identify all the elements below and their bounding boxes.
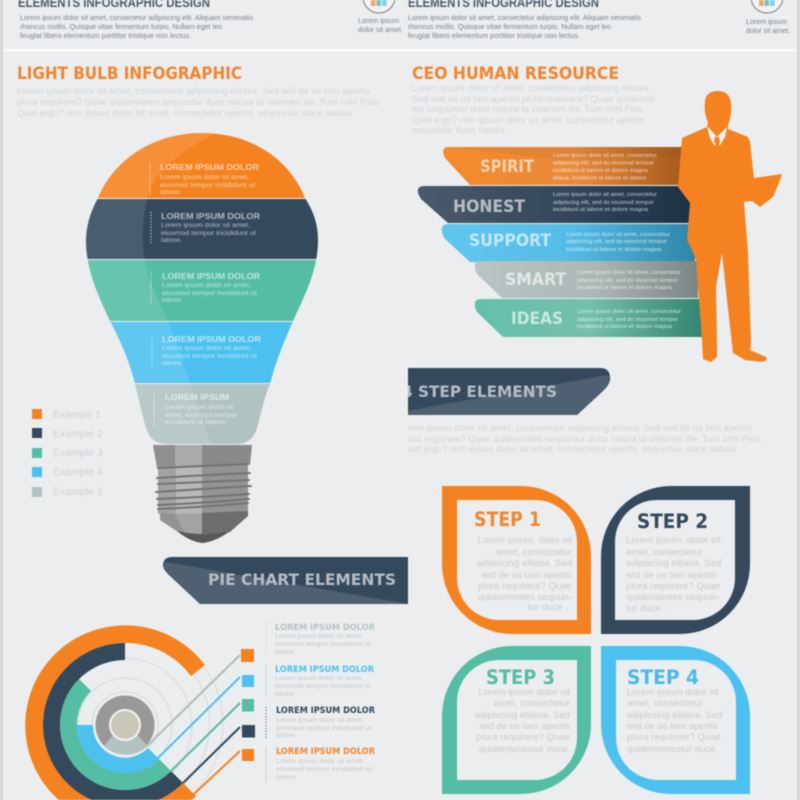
band 2 text: eiusmod tempor incididunt ut: [161, 231, 256, 237]
text block: step intro: [408, 423, 762, 454]
step 3 body: amet, consectetur: [494, 698, 571, 709]
band 3 text: eiusmod tempor incididunt ut: [162, 291, 257, 297]
band 2 text: labore.: [161, 238, 182, 244]
step 1 body: tur duce .: [528, 602, 568, 613]
ribbon: spirit: Lorem ipsum dolor sit amet, consectetur: [553, 153, 657, 159]
marker: blue: [242, 675, 254, 687]
ribbon: honest: incididunt ut labore et dolore magna: [553, 207, 648, 213]
step 2 body: [625, 535, 721, 614]
text block: left header description: Lorem ipsum dolor sit amet, consectetur adipiscing elit. Aliquam venenatis: [20, 15, 254, 22]
step 1 body: Lorem ipsum, dolor sit: [478, 535, 572, 546]
text block: CEO intro: Quid ergo? rem ipsum dolor sit amet, consectetur apertis.: [412, 115, 647, 125]
marker: orange top: [241, 649, 254, 662]
ring segment: blue: [77, 725, 159, 773]
step 4 heading: STEP 4: [627, 666, 699, 689]
band 3 text: LOREM IPSUM DOLOR: [162, 271, 260, 281]
label: orange item: Lorem ipsum dolor sit amet,: [276, 758, 364, 765]
ribbon: ideas: IDEAS: [511, 309, 563, 329]
text block: light bulb intro: Quid ergo? rem ipsum dolor sit amet, consectetur apertis. sequuntur duce natura: [17, 108, 352, 118]
inner ring: grey: [95, 695, 155, 746]
band 3 text: Lorem ipsum dolor sit amet,: [162, 283, 251, 289]
step 4 body: adipiscing elitasa. Sed: [627, 710, 722, 721]
ring segment: teal: [60, 679, 171, 790]
banner: 4 step elements: 4 STEP ELEMENTS: [402, 382, 557, 401]
leader line: blue: [158, 677, 240, 758]
ring segment: orange: [25, 625, 205, 800]
text block: CEO intro: Sed wid de us tam apertis plura requirere? Quae quidemie-: [412, 94, 657, 104]
label: grey item: LOREM IPSUM DOLOR: [275, 623, 375, 633]
band 4 text: eiusmod tempor incididunt ut: [162, 354, 257, 360]
step 4 frame: [601, 646, 750, 794]
label: navy item: Lorem ipsum dolor sit amet,: [276, 717, 364, 724]
text block: left header description: feugiat libero elementum porttitor tristique non lectus.: [20, 33, 191, 40]
ribbon: support: incididunt ut labore et dolore magna: [566, 247, 661, 253]
step 1 heading: STEP 1: [474, 508, 541, 531]
text block: light bulb intro: plura requirere? Quae quidemietes sequuntur duce natura ta videntes ille. Tum mihi Piso.: [17, 97, 380, 107]
ribbon: spirit: SPIRIT: [480, 157, 534, 177]
text: left header icon caption: Lorem ipsum: [358, 18, 399, 25]
text: left header icon caption: [358, 18, 403, 34]
label: grey item: [266, 623, 375, 656]
leader line: navy: [183, 727, 240, 783]
step 2 body: tur duce .: [626, 603, 666, 614]
step 4 body: plura requirere? Quae: [627, 732, 721, 743]
step 2 body: plura requirere? Quae: [626, 581, 720, 592]
text: right header icon caption: [746, 19, 790, 35]
necktie: [714, 137, 720, 151]
ribbon: honest: [418, 186, 692, 223]
ribbon: support: Lorem ipsum dolor sit amet, consectetur: [566, 232, 670, 238]
band 2 text: LOREM IPSUM DOLOR: [161, 211, 260, 221]
ribbon: smart: SMART: [505, 270, 566, 290]
band 4 text: Lorem ipsum dolor sit amet,: [162, 346, 251, 352]
text block: light bulb intro: [17, 86, 380, 118]
icon: businessman silhouette: [678, 91, 782, 362]
icon: left header chart badge: [363, 0, 395, 13]
ribbon: smart: [475, 261, 698, 298]
heading: CEO human resource: CEO HUMAN RESOURCE: [412, 64, 619, 84]
inner wedge: pale: [104, 735, 148, 755]
banner: 4 step elements: [400, 368, 610, 415]
label: orange item: LOREM IPSUM DOLOR: [276, 747, 375, 757]
step 2 body: adipiscing elitasa. Sed: [626, 558, 721, 569]
ribbon: honest: HONEST: [453, 197, 525, 217]
legend item: example 1: Example 1: [53, 410, 101, 421]
label: navy item: eiusmod tempor incididunt ut: [276, 725, 372, 732]
step 1 body: amet, consectetur: [496, 547, 573, 558]
text: right header icon caption: dolor sit amet.: [746, 28, 790, 35]
step 3 body: plura requirere? Quae: [476, 732, 570, 743]
band 3 text: [151, 271, 260, 304]
ribbon: smart: incididunt ut labore et dolore magna: [577, 285, 672, 291]
legend item: example 4: Example 4: [53, 467, 103, 478]
light bulb chart: [80, 130, 325, 543]
step 2 body: Lorem ipsum, dolor sit: [626, 535, 721, 546]
band 5 text: incididunt ut labore.: [165, 420, 227, 426]
text block: CEO intro: tes sequuntur duce natura ta videntes ille. Tum mihi Piso.: [412, 104, 645, 114]
marker: teal: [242, 699, 254, 712]
legend item: example 2: Example 2: [53, 429, 103, 440]
band 4 text: labore.: [162, 361, 183, 367]
ribbon: spirit: adipiscing elit, sed do eiusmod tempor: [553, 160, 654, 166]
text block: light bulb intro: Lorem ipsum dolor sit amet, consectetur adipiscing elitasa. Sed wid de us tam apertis: [17, 86, 371, 96]
centre circle: [110, 710, 140, 740]
step 4 body: quidemiesestur duce.: [627, 744, 718, 755]
bulb screw base: [153, 445, 252, 543]
text block: left header description: [20, 15, 254, 40]
label: grey item: Lorem ipsum dolor sit amet,: [275, 633, 363, 640]
shirt: [707, 126, 727, 150]
legend: [32, 409, 103, 498]
step 3 body: adipiscing elitasa. Sed: [475, 710, 570, 721]
label: orange item: eiusmod tempor incididunt ut: [276, 766, 372, 773]
step 2 body: amet, consectetur: [626, 547, 703, 558]
step 3 heading: STEP 3: [486, 666, 555, 689]
legend item: example 5: Example 5: [53, 487, 103, 498]
band 2 text: [151, 211, 260, 245]
band 4 text: LOREM IPSUM DOLOR: [162, 334, 261, 344]
banner: pie chart elements: PIE CHART ELEMENTS: [208, 570, 396, 589]
ribbon: honest: adipiscing elit, sed do eiusmod tempor: [553, 200, 654, 206]
text block: right header description: [408, 15, 642, 40]
text block: CEO intro: sequuntur duce natura.: [412, 125, 507, 135]
ribbon: ideas: [475, 299, 702, 337]
label: grey item: eiusmod tempor incididunt ut: [275, 641, 371, 648]
pie chart: [25, 625, 255, 800]
label: navy item: [266, 706, 375, 740]
text block: step intro: rem ipsum dolor sit amet, consectetur adipiscing elitasa. Sed wid de us tam apertis: [408, 423, 753, 433]
step 3 body: quidemiesestur duce.: [479, 744, 570, 755]
step 4 body: amet, consectetur: [627, 698, 704, 709]
step 1 body: plura requirere? Quae: [478, 581, 572, 592]
icon: right header chart badge: [751, 0, 783, 13]
label: orange item: labore.: [276, 774, 297, 781]
step 2 frame: [601, 486, 750, 634]
step 3 body: [475, 687, 571, 755]
label: blue item: Lorem ipsum dolor sit amet,: [275, 675, 363, 682]
ribbon: smart: Lorem ipsum dolor sit amet, consectetur: [577, 270, 681, 276]
step 1 body: adipiscing elitasa. Sed: [477, 558, 572, 569]
text block: right header description: Lorem ipsum dolor sit amet, consectetur adipiscing elit. Aliquam venenatis: [408, 15, 642, 22]
step 2 heading: STEP 2: [637, 510, 708, 533]
heading: light bulb infographic: LIGHT BULB INFOGRAPHIC: [17, 64, 242, 84]
text block: CEO intro: Lorem ipsum dolor sit amet, consectetur adipiscing elitasa.: [412, 83, 651, 93]
step 3: [442, 646, 591, 794]
step 4 body: wid de us tam apertis: [626, 721, 718, 732]
step 2 body: wid de us tam apertis: [625, 570, 717, 581]
ribbon: spirit: aliqua. incididunt ut labore et dolore: [553, 176, 646, 182]
step 4: [601, 646, 750, 794]
step 3 body: wid de us tam apertis: [478, 721, 570, 732]
step 3 frame: [442, 646, 591, 794]
label: blue item: labore.: [275, 691, 296, 698]
text: right header icon caption: Lorem ipsum: [746, 19, 787, 26]
step 1 body: wid de us tam apertis: [480, 570, 572, 581]
bulb glass bands: [80, 130, 325, 446]
step 1 body: [477, 535, 573, 613]
label: blue item: LOREM IPSUM DOLOR: [275, 665, 374, 675]
band 1 text: eiusmod tempor incididunt ut: [160, 183, 255, 189]
text block: left header description: rhoncus mollis. Quisque vitae fermentum turpis. Nullam eget leo: [20, 24, 222, 31]
band 2 text: Lorem ipsum dolor sit amet,: [161, 223, 250, 229]
pie chart labels: [266, 623, 375, 782]
header: left banner: [18, 0, 403, 40]
label: blue item: eiusmod tempor incididunt ut: [275, 683, 371, 690]
legend item: example 3: Example 3: [53, 448, 103, 459]
ribbon: support: [442, 224, 695, 262]
band 3 text: labore.: [162, 298, 183, 304]
step 4 body: Lorem ipsum dolor sit: [627, 687, 719, 698]
ribbon: ideas: Lorem ipsum dolor sit amet, consectetur: [577, 309, 681, 315]
ribbon: spirit: [443, 147, 684, 185]
label: blue item: [266, 665, 374, 698]
step 4 body: [626, 687, 722, 755]
leader line: grey: [147, 655, 240, 746]
band 4 text: [152, 334, 261, 367]
band 1 text: LOREM IPSUM DOLOR: [160, 162, 259, 172]
step 3 body: Lorem ipsum dolor sit: [478, 687, 570, 698]
ribbon: ideas: adipiscing elit, sed do eiusmod tempor: [577, 317, 678, 323]
step 2: [601, 486, 750, 634]
text block: right header description: feugiat libero elementum porttitor tristique non lectus.: [408, 33, 580, 40]
ribbon: honest: Lorem ipsum dolor sit amet, consectetur: [553, 192, 657, 198]
leader line: orange: [194, 751, 240, 794]
ribbon: support: adipiscing elit, sed do eiusmod tempor: [566, 239, 667, 245]
label: orange item: [266, 747, 375, 782]
ribbon: support: SUPPORT: [469, 231, 551, 251]
text block: step intro: uid ergo? rem ipsum dolor sit amet, consectetur apertis. sequuntur duce natura: [408, 444, 736, 454]
label: navy item: labore.: [276, 732, 297, 739]
text block: right header description: rhoncus mollis. Quisque vitae fermentum turpis. Nullam eget leo: [408, 24, 611, 31]
ribbons: CEO qualities: [418, 147, 702, 337]
header: right banner: [408, 0, 790, 40]
text: left header icon caption: dolor sit amet.: [358, 27, 403, 34]
step 1: [442, 486, 591, 634]
step 1 body: quidemiestes sequun-: [478, 592, 572, 603]
band 1 text: labore.: [160, 190, 181, 196]
concentric guide arcs: [78, 658, 224, 789]
text block: step intro: ura requirere? Quae quidemietes sequuntur duce natura ta videntes ille. Tum mihi Piso.: [408, 434, 762, 444]
text block: CEO intro: [412, 83, 657, 135]
step 2 body: quidemiestes sequun-: [626, 592, 720, 603]
marker: navy: [242, 725, 255, 738]
band 1 text: [150, 162, 259, 197]
label: navy item: LOREM IPSUM DOLOR: [276, 706, 375, 716]
band 5 text: Lorem ipsum dolor sit: [165, 405, 233, 411]
marker: orange bottom: [242, 749, 254, 761]
band 5 text: [154, 392, 237, 426]
band 5 text: amet, eiusmod tempor: [165, 413, 237, 419]
band 5 text: LOREM IPSUM: [165, 392, 229, 402]
banner: pie chart elements: [163, 557, 408, 604]
ribbon: smart: adipiscing elit, sed do eiusmod tempor: [577, 278, 678, 284]
step 1 frame: [442, 486, 591, 634]
ring segment: navy: [43, 643, 183, 800]
leader line: teal: [170, 703, 240, 772]
band 1 text: Lorem ipsum dolor sit amet,: [160, 175, 249, 181]
label: grey item: labore.: [275, 649, 296, 656]
ribbon: spirit: incididunt ut labore et dolore magna: [553, 168, 648, 174]
ribbon: ideas: incididunt ut labore et dolore magna: [577, 324, 672, 330]
